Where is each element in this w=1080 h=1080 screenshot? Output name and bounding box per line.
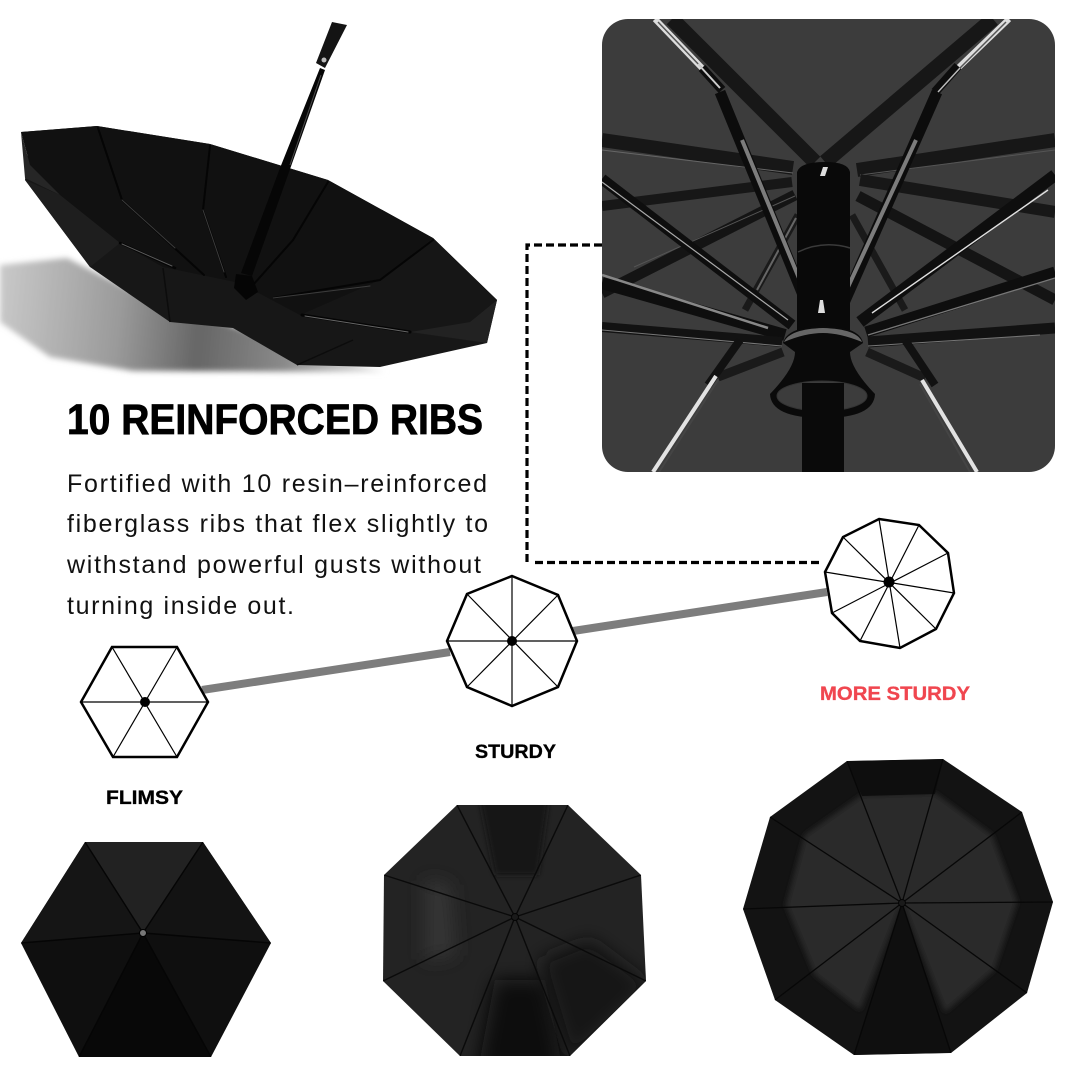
fabric seams right side bbox=[852, 140, 1055, 346]
photo: ten-rib umbrella bbox=[743, 759, 1053, 1055]
fabric seams left side bbox=[602, 140, 798, 346]
photo panel: rib close-up bbox=[602, 19, 1055, 472]
description text: withstand powerful gusts without bbox=[66, 551, 481, 579]
lower struts bbox=[653, 340, 977, 472]
panel background bbox=[602, 19, 1055, 472]
umbrella shaft bbox=[241, 68, 325, 276]
ribs bbox=[21, 842, 271, 1057]
icon: eight-rib frame bbox=[447, 576, 577, 706]
umbrella canopy bbox=[21, 126, 497, 367]
handle shaft bbox=[802, 383, 844, 472]
label: more sturdy: MORE STURDY bbox=[820, 683, 970, 705]
central hub and stem bbox=[797, 162, 850, 330]
umbrella handle bbox=[316, 22, 347, 68]
umbrella ribs underside bbox=[98, 128, 433, 332]
title: 10 REINFORCED RIBS bbox=[67, 396, 483, 444]
gray progression line: flimsy to sturdy bbox=[202, 652, 450, 690]
icon: six-rib frame bbox=[81, 647, 208, 757]
label: flimsy: FLIMSY bbox=[106, 787, 183, 809]
label: sturdy: STURDY bbox=[475, 741, 556, 763]
upper-right strut bbox=[840, 19, 1009, 312]
ribs bbox=[743, 759, 1053, 1055]
photo: open umbrella tilted on the ground bbox=[0, 22, 497, 372]
photo: six-rib umbrella bbox=[21, 842, 271, 1057]
lower collar with ring bbox=[770, 300, 875, 418]
umbrella hub bbox=[234, 274, 258, 300]
description text: turning inside out. bbox=[67, 592, 294, 620]
ribs bbox=[383, 805, 646, 1056]
icon: ten-rib frame bbox=[825, 519, 954, 648]
description text bbox=[66, 470, 488, 620]
upper dark fabric bands bbox=[672, 19, 993, 162]
center cap bbox=[140, 930, 146, 936]
description text: fiberglass ribs that flex slightly to bbox=[67, 510, 488, 538]
umbrella ground shadow bbox=[0, 258, 385, 372]
center cap bbox=[512, 914, 518, 920]
upper-left strut bbox=[652, 19, 797, 294]
gray progression line: sturdy to more sturdy bbox=[573, 592, 827, 631]
dashed connector from panel to ten-rib icon bbox=[527, 245, 820, 562]
photo: eight-rib umbrella bbox=[383, 805, 646, 1056]
description text: Fortified with 10 resin–reinforced bbox=[67, 470, 487, 498]
center cap bbox=[898, 900, 906, 906]
